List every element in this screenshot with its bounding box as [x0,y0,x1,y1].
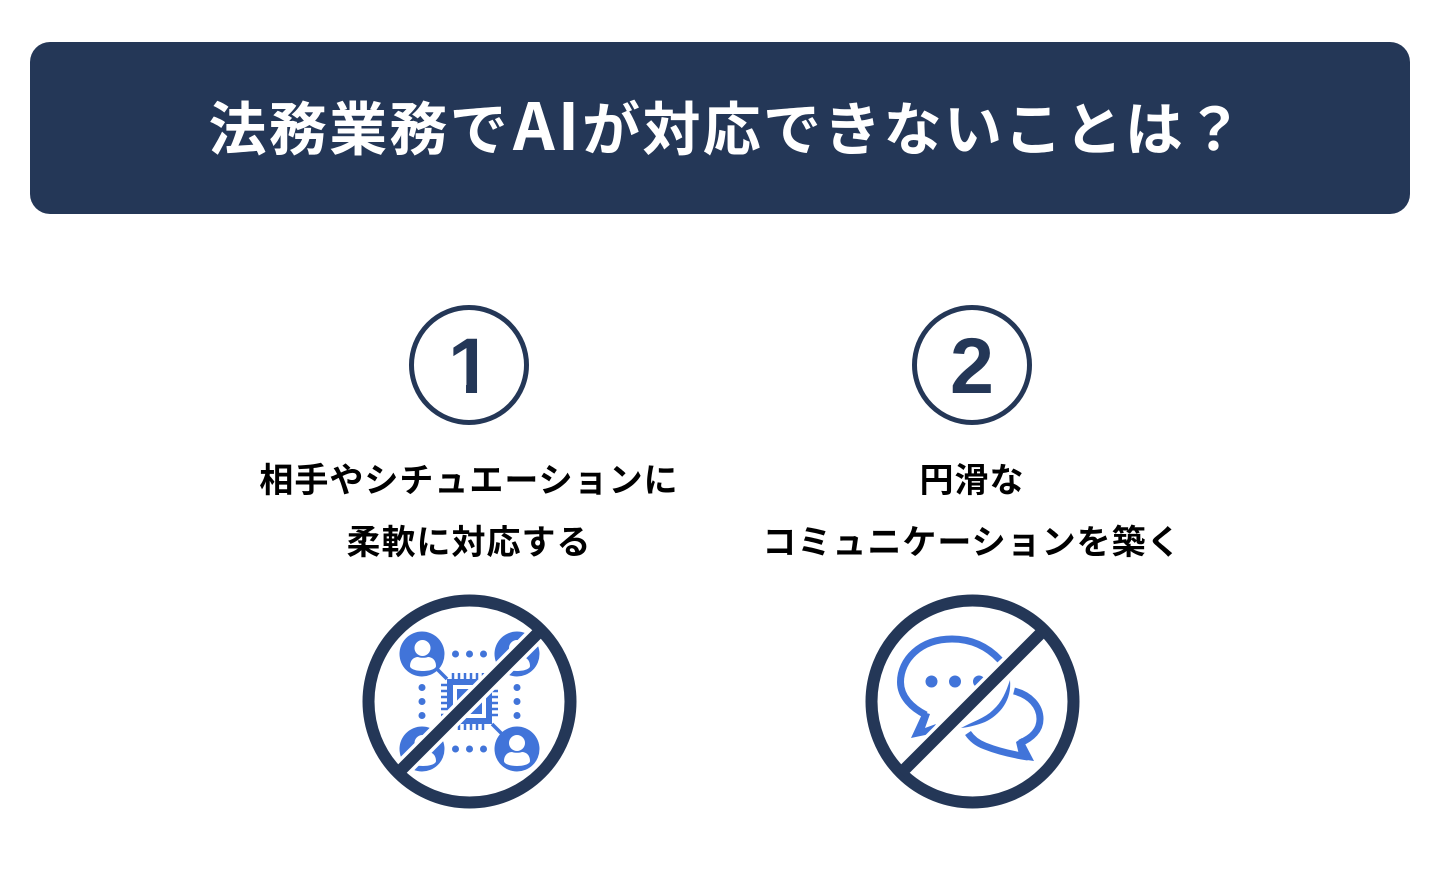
number badge 1: 1 [448,321,492,410]
text: item 2 label: 円滑な [920,462,1024,500]
title banner [30,42,1410,214]
text: item 1 label [259,462,679,562]
text: item 2 label [762,462,1182,562]
icon: prohibited AI chip and people network [362,594,576,808]
number badge 2 [912,305,1032,425]
number badge 1 [409,305,529,425]
text: item 2 label: コミュニケーションを築く [762,524,1182,562]
number badge 2: 2 [950,321,994,410]
title: 法務業務でAIが対応できないことは？ [209,75,1245,169]
text: item 1 label: 相手やシチュエーションに [259,462,679,500]
text: item 1 label: 柔軟に対応する [346,524,592,562]
icon: prohibited speech bubbles [866,594,1080,808]
